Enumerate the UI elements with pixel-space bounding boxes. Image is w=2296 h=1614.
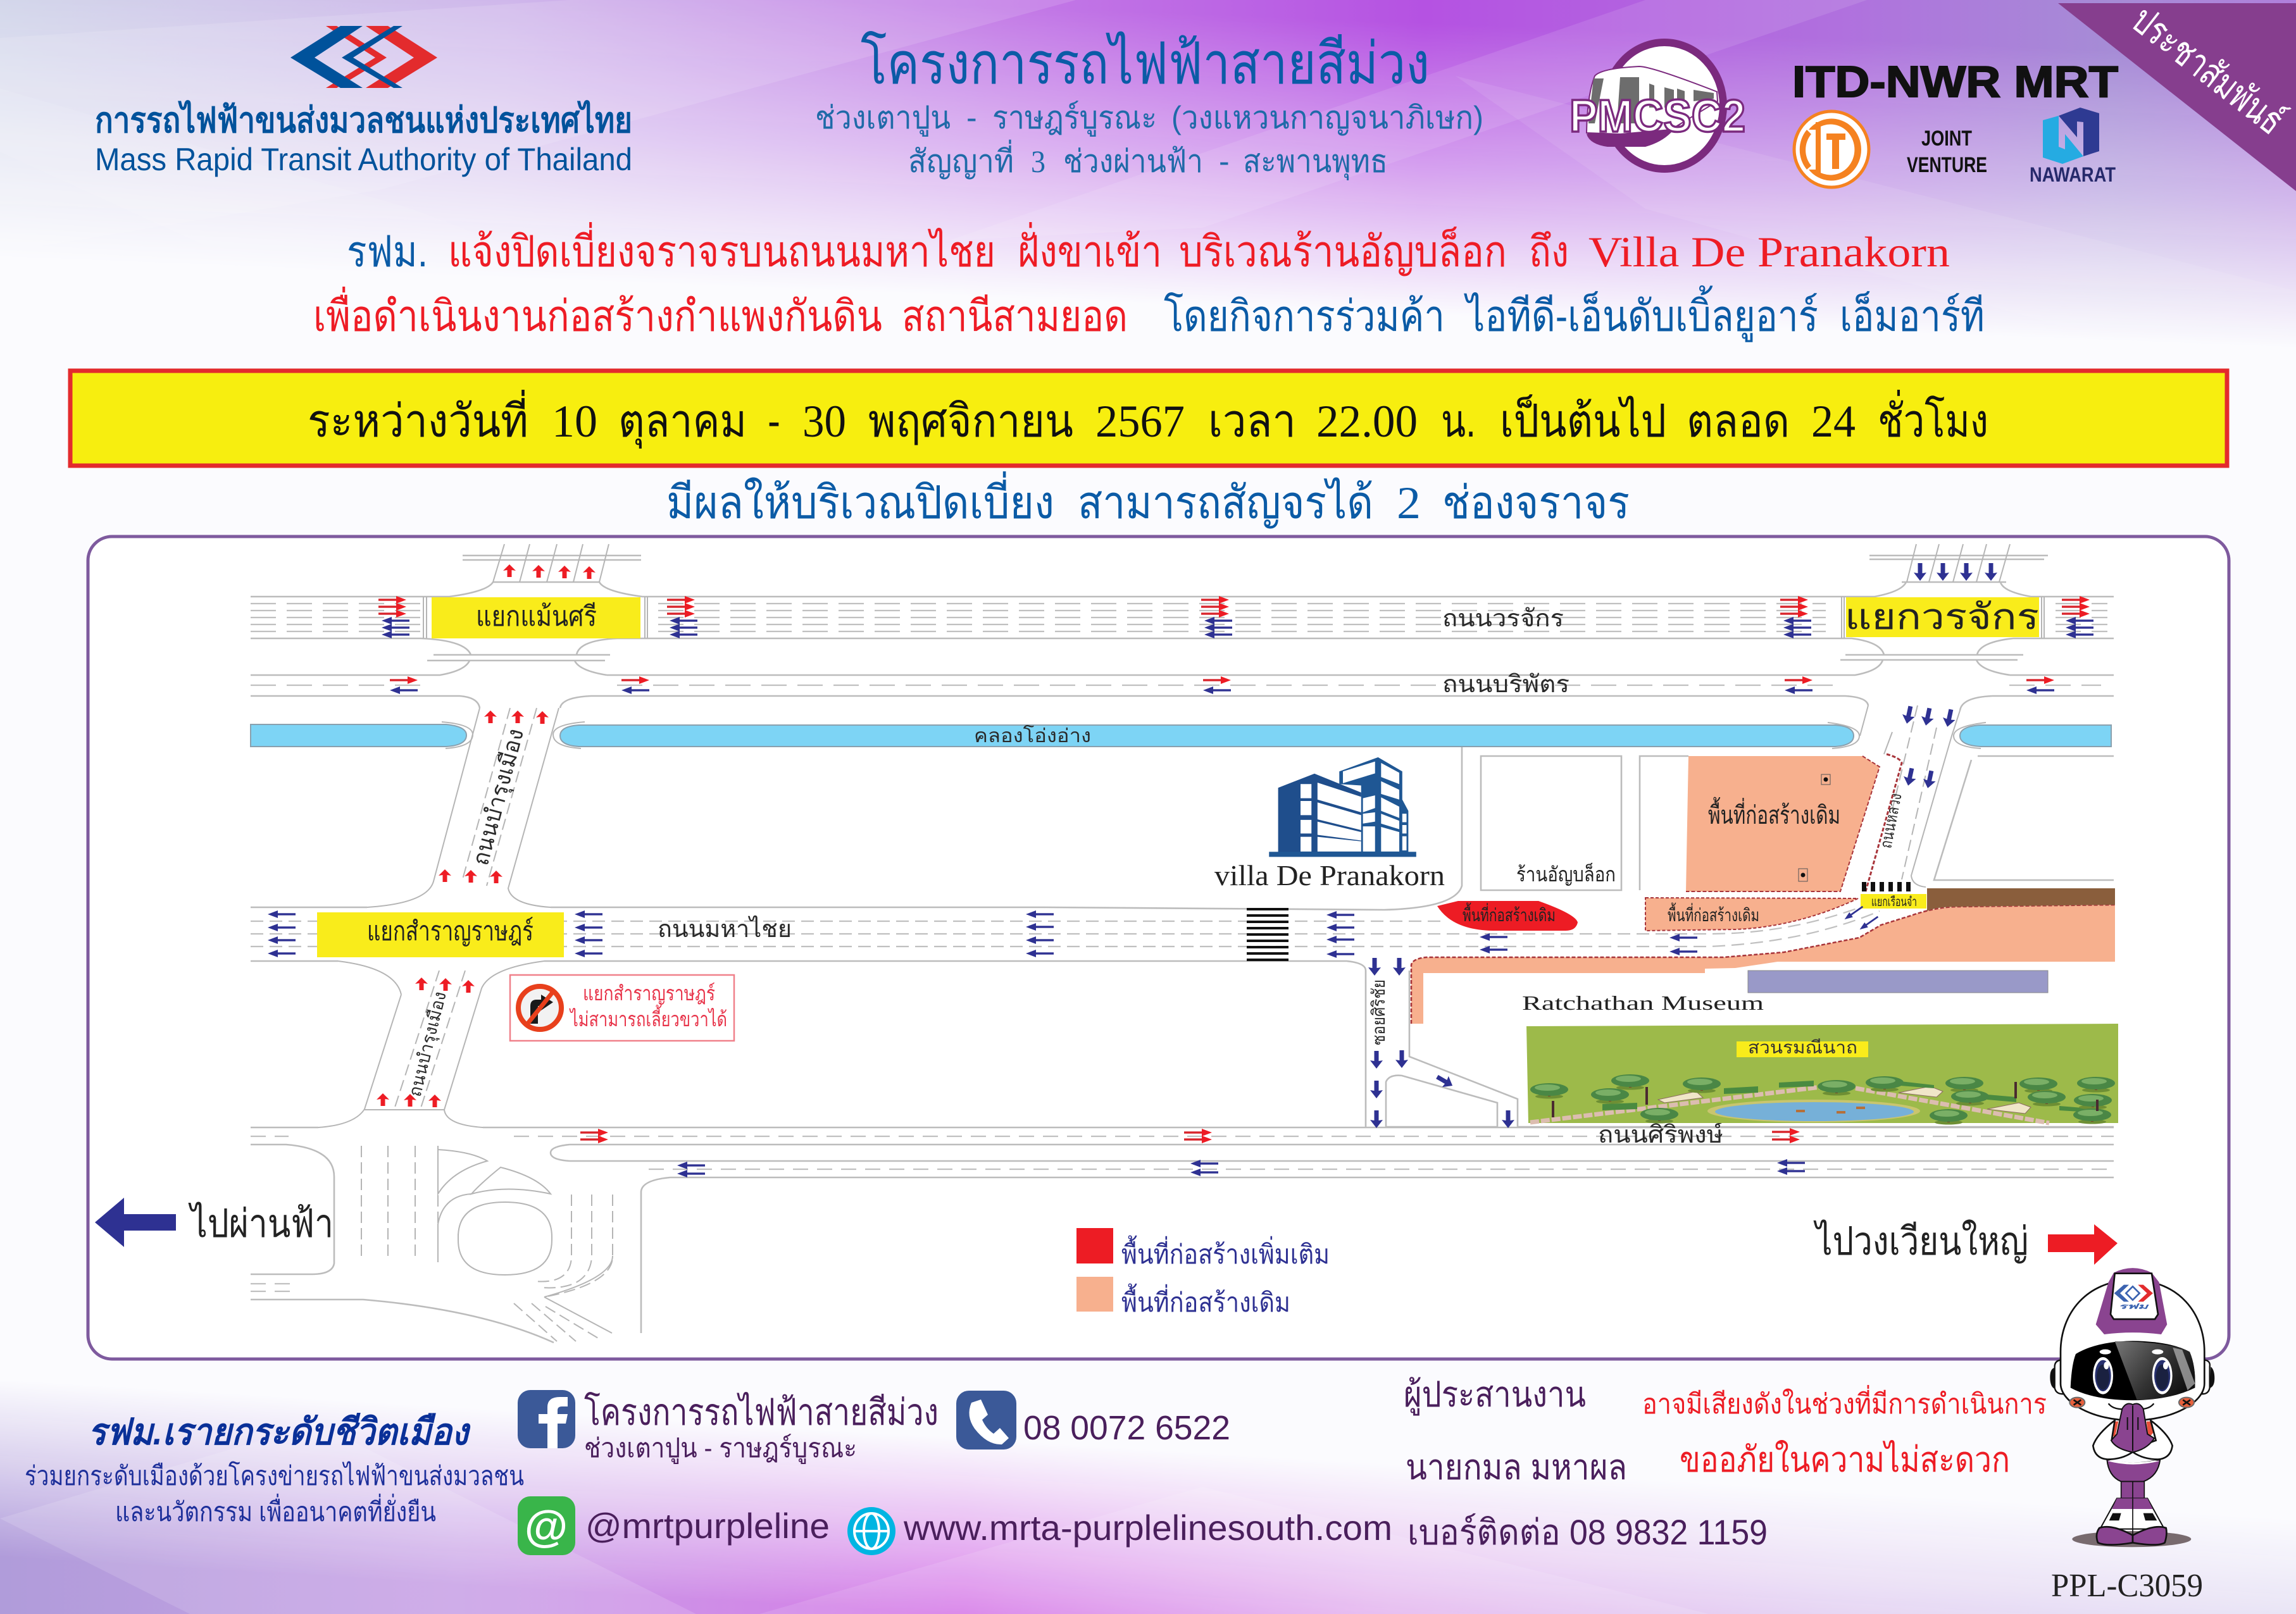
crosswalk: Ruean Cham [1862, 882, 1911, 891]
date banner: ระหว่างวันที่ [308, 390, 528, 447]
subtitle: section [815, 100, 1483, 137]
road labels: ถนนวรจักร [1442, 605, 1564, 632]
construction area: north block [1686, 756, 1880, 891]
mascot: รฟม [2118, 1303, 2150, 1311]
label: canal: คลองโอ่งอ่าง [974, 724, 1091, 747]
notice line 2 [313, 285, 1985, 342]
date banner: พฤศจิกายน [868, 396, 1073, 447]
legend [1076, 1228, 1330, 1317]
subheading: affected lanes: มีผลให้บริเวณปิดเบี่ยง [666, 471, 1054, 528]
notice line 1: รฟม. [347, 228, 428, 276]
date banner: 22.00 [1316, 396, 1418, 447]
date banner: 2567 [1095, 396, 1185, 447]
date banner [70, 371, 2227, 466]
panel: map [88, 537, 2229, 1359]
icon: MRTA logo [290, 26, 437, 88]
road labels: ถนนมหาไชย [658, 916, 792, 943]
notice line 2: สถานีสามยอด [902, 292, 1128, 340]
label: to Wongwian Yai: ไปวงเวียนใหญ่ [1813, 1219, 2028, 1263]
contact: facebook page [584, 1391, 939, 1464]
subheading: affected lanes: 2 [1397, 478, 1421, 528]
label: to Phan Fa: ไปผ่านฟ้า [188, 1201, 334, 1246]
label: joint venture [1907, 127, 1987, 177]
code: PPL-C3059: PPL-C3059 [2051, 1568, 2203, 1604]
sign: no right turn: ไม่สามารถเลี้ยวขวาได้ [569, 1005, 727, 1031]
junction label: Samran Rat: แยกสำราญราษฎร์ [367, 916, 533, 947]
apology notice [1642, 1384, 2047, 1479]
construction area: orange middle [1645, 898, 1858, 931]
road labels [405, 605, 1906, 1148]
road labels: ถนนบำรุงเมือง [405, 990, 451, 1099]
date banner: 24 [1811, 396, 1856, 447]
junction label: Worachak: แยกวรจักร [1845, 597, 2039, 636]
date banner: 30 [802, 396, 846, 447]
coordinator block: เบอร์ติดต่อ 08 9832 1159 [1407, 1512, 1768, 1552]
subtitle: contract: สะพานพุทธ [1243, 144, 1388, 180]
coordinator block [1404, 1374, 1768, 1552]
park [1526, 1024, 2118, 1125]
notice line 2: โดยกิจการร่วมค้า [1164, 292, 1445, 340]
subtitle: contract: 3 [1031, 144, 1045, 179]
subtitle: section: ราษฎร์บูรณะ [992, 100, 1157, 137]
slogan block: รฟม.เรายกระดับชีวิตเมือง [88, 1412, 471, 1453]
road labels: ถนนหลวง [1876, 791, 1906, 850]
icon: Nawarat logo: NAWARAT [2030, 163, 2116, 186]
heading: MRTA Thai name: การรถไฟฟ้าขนส่งมวลชนแห่งประเทศไทย [95, 99, 632, 140]
label: joint venture: JOINT [1921, 127, 1972, 151]
brown area [1927, 888, 2115, 911]
road network [251, 544, 2114, 1343]
sign: no right turn: แยกสำราญราษฎร์ [583, 982, 715, 1005]
junction label: Samran Rat [317, 912, 564, 957]
notice line 2: เพื่อดำเนินงานก่อสร้างกำแพงกันดิน [313, 287, 882, 340]
icon: PMCSC2 logo [1569, 42, 1745, 169]
museum building [1748, 971, 2048, 993]
notice line 1: Villa De Pranakorn [1588, 228, 1950, 276]
title: โครงการรถไฟฟ้าสายสีม่วง [861, 31, 1430, 96]
icon: Nawarat logo [2030, 108, 2116, 186]
legend: พื้นที่ก่อสร้างเพิ่มเติม [1121, 1235, 1330, 1269]
icon: line [518, 1496, 575, 1555]
subheading: affected lanes: สามารถสัญจรได้ [1078, 477, 1373, 528]
date banner: น. [1441, 396, 1476, 447]
contact: line id: @mrtpurpleline [585, 1506, 830, 1546]
subtitle: contract [908, 140, 1388, 180]
construction area: south corridor [1411, 905, 2115, 1024]
label: block shop: ร้านอัญบล็อก [1516, 862, 1616, 886]
subtitle: section: ช่วงเตาปูน [815, 100, 951, 137]
icon: line: @ [525, 1501, 568, 1551]
subheading: affected lanes [666, 471, 1630, 528]
legend: พื้นที่ก่อสร้างเดิม [1121, 1283, 1290, 1317]
road labels: ถนนบำรุงเมือง [467, 726, 530, 869]
notice line 2: ไอทีดี-เอ็นดับเบิ้ลยูอาร์ [1464, 285, 1818, 342]
label: joint venture: VENTURE [1907, 153, 1987, 177]
arrow: to Phan Fa [95, 1198, 176, 1247]
icon: phone [956, 1391, 1016, 1449]
notice line 1: บริเวณร้านอัญบล็อก [1179, 227, 1507, 276]
banner: public relations corner [2058, 0, 2296, 191]
date banner: เป็นต้นไป [1500, 394, 1666, 447]
date banner: ชั่วโมง [1878, 390, 1988, 447]
icon: PMCSC2 logo: PMCSC2 [1569, 91, 1745, 142]
subtitle: section: - [966, 100, 977, 135]
date banner: เวลา [1208, 396, 1296, 447]
construction area: additional red: พื้นที่ก่อสร้างเดิม [1463, 902, 1556, 925]
road labels: ซอยศิริชัย [1369, 979, 1388, 1045]
date banner: ตุลาคม [618, 396, 747, 449]
road labels: ถนนบริพัตร [1442, 671, 1569, 698]
icon: web globe [847, 1507, 895, 1555]
icon: ITD logo [1794, 111, 1869, 187]
sign: no right turn [510, 975, 734, 1041]
coordinator block: นายกมล มหาผล [1406, 1447, 1627, 1487]
apology notice: ขออภัยในความไม่สะดวก [1680, 1439, 2010, 1479]
apology notice: อาจมีเสียงดังในช่วงที่มีการดำเนินการ [1642, 1384, 2047, 1420]
construction area: orange middle: พื้นที่ก่อสร้างเดิม [1668, 902, 1759, 925]
slogan block: ร่วมยกระดับเมืองด้วยโครงข่ายรถไฟฟ้าขนส่งมวลชน [25, 1460, 524, 1491]
notice line 2: เอ็มอาร์ที [1840, 291, 1985, 340]
construction area: north block: พื้นที่ก่อสร้างเดิม [1708, 797, 1840, 829]
crosswalk: Maha Chai [1247, 908, 1288, 961]
icon: facebook [518, 1390, 575, 1448]
contact: phone: 08 0072 6522 [1023, 1409, 1230, 1447]
subtitle: contract: ช่วงผ่านฟ้า [1063, 144, 1203, 179]
notice line 1: ฝั่งขาเข้า [1018, 222, 1162, 276]
label: Ruean Cham junction [1861, 894, 1926, 909]
junction label: Maen Si [432, 597, 640, 638]
contact: website: www.mrta-purplelinesouth.com [903, 1508, 1392, 1548]
canal [251, 724, 2111, 747]
road labels: ถนนศิริพงษ์ [1598, 1121, 1723, 1148]
red dashed road edge [1866, 754, 1902, 891]
subtitle: contract: สัญญาที่ [908, 140, 1014, 179]
subheading: affected lanes: ช่องจราจร [1442, 478, 1630, 528]
contact: facebook page: ช่วงเตาปูน - ราษฎร์บูรณะ [584, 1433, 857, 1464]
date banner: - [768, 396, 780, 447]
arrow: to Wongwian Yai [2048, 1224, 2118, 1265]
notice line 1 [347, 222, 1950, 276]
label: villa De Pranakorn: villa De Pranakorn [1214, 859, 1445, 891]
construction area: additional red [1437, 901, 1578, 931]
slogan block [25, 1412, 524, 1527]
notice line 1: ถึง [1529, 228, 1569, 276]
park: สวนรมณีนาถ [1748, 1038, 1857, 1057]
heading: ITD-NWR MRT: ITD-NWR MRT [1792, 57, 2118, 106]
junction label: Maen Si: แยกแม้นศรี [476, 601, 597, 632]
coordinator block: ผู้ประสานงาน [1404, 1374, 1586, 1416]
contact: facebook page: โครงการรถไฟฟ้าสายสีม่วง [584, 1391, 939, 1433]
label: Ruean Cham junction: แยกเรือนจำ [1871, 895, 1917, 909]
label: museum: Ratchathan Museum [1522, 991, 1764, 1014]
date banner: ตลอด [1687, 396, 1790, 447]
notice line 1: แจ้งปิดเบี่ยงจราจรบนถนนมหาไชย [448, 222, 995, 276]
mascot [2050, 1268, 2214, 1547]
subtitle: contract: - [1219, 144, 1230, 179]
subtitle: section: (วงแหวนกาญจนาภิเษก) [1171, 100, 1483, 135]
date banner: 10 [552, 396, 597, 447]
heading: MRTA English name: Mass Rapid Transit Authority of Thailand [95, 142, 632, 177]
slogan block: และนวัตกรรม เพื่ออนาคตที่ยั่งยืน [115, 1494, 436, 1527]
icon: villa building [1269, 757, 1416, 857]
traffic arrows [268, 563, 2093, 1177]
